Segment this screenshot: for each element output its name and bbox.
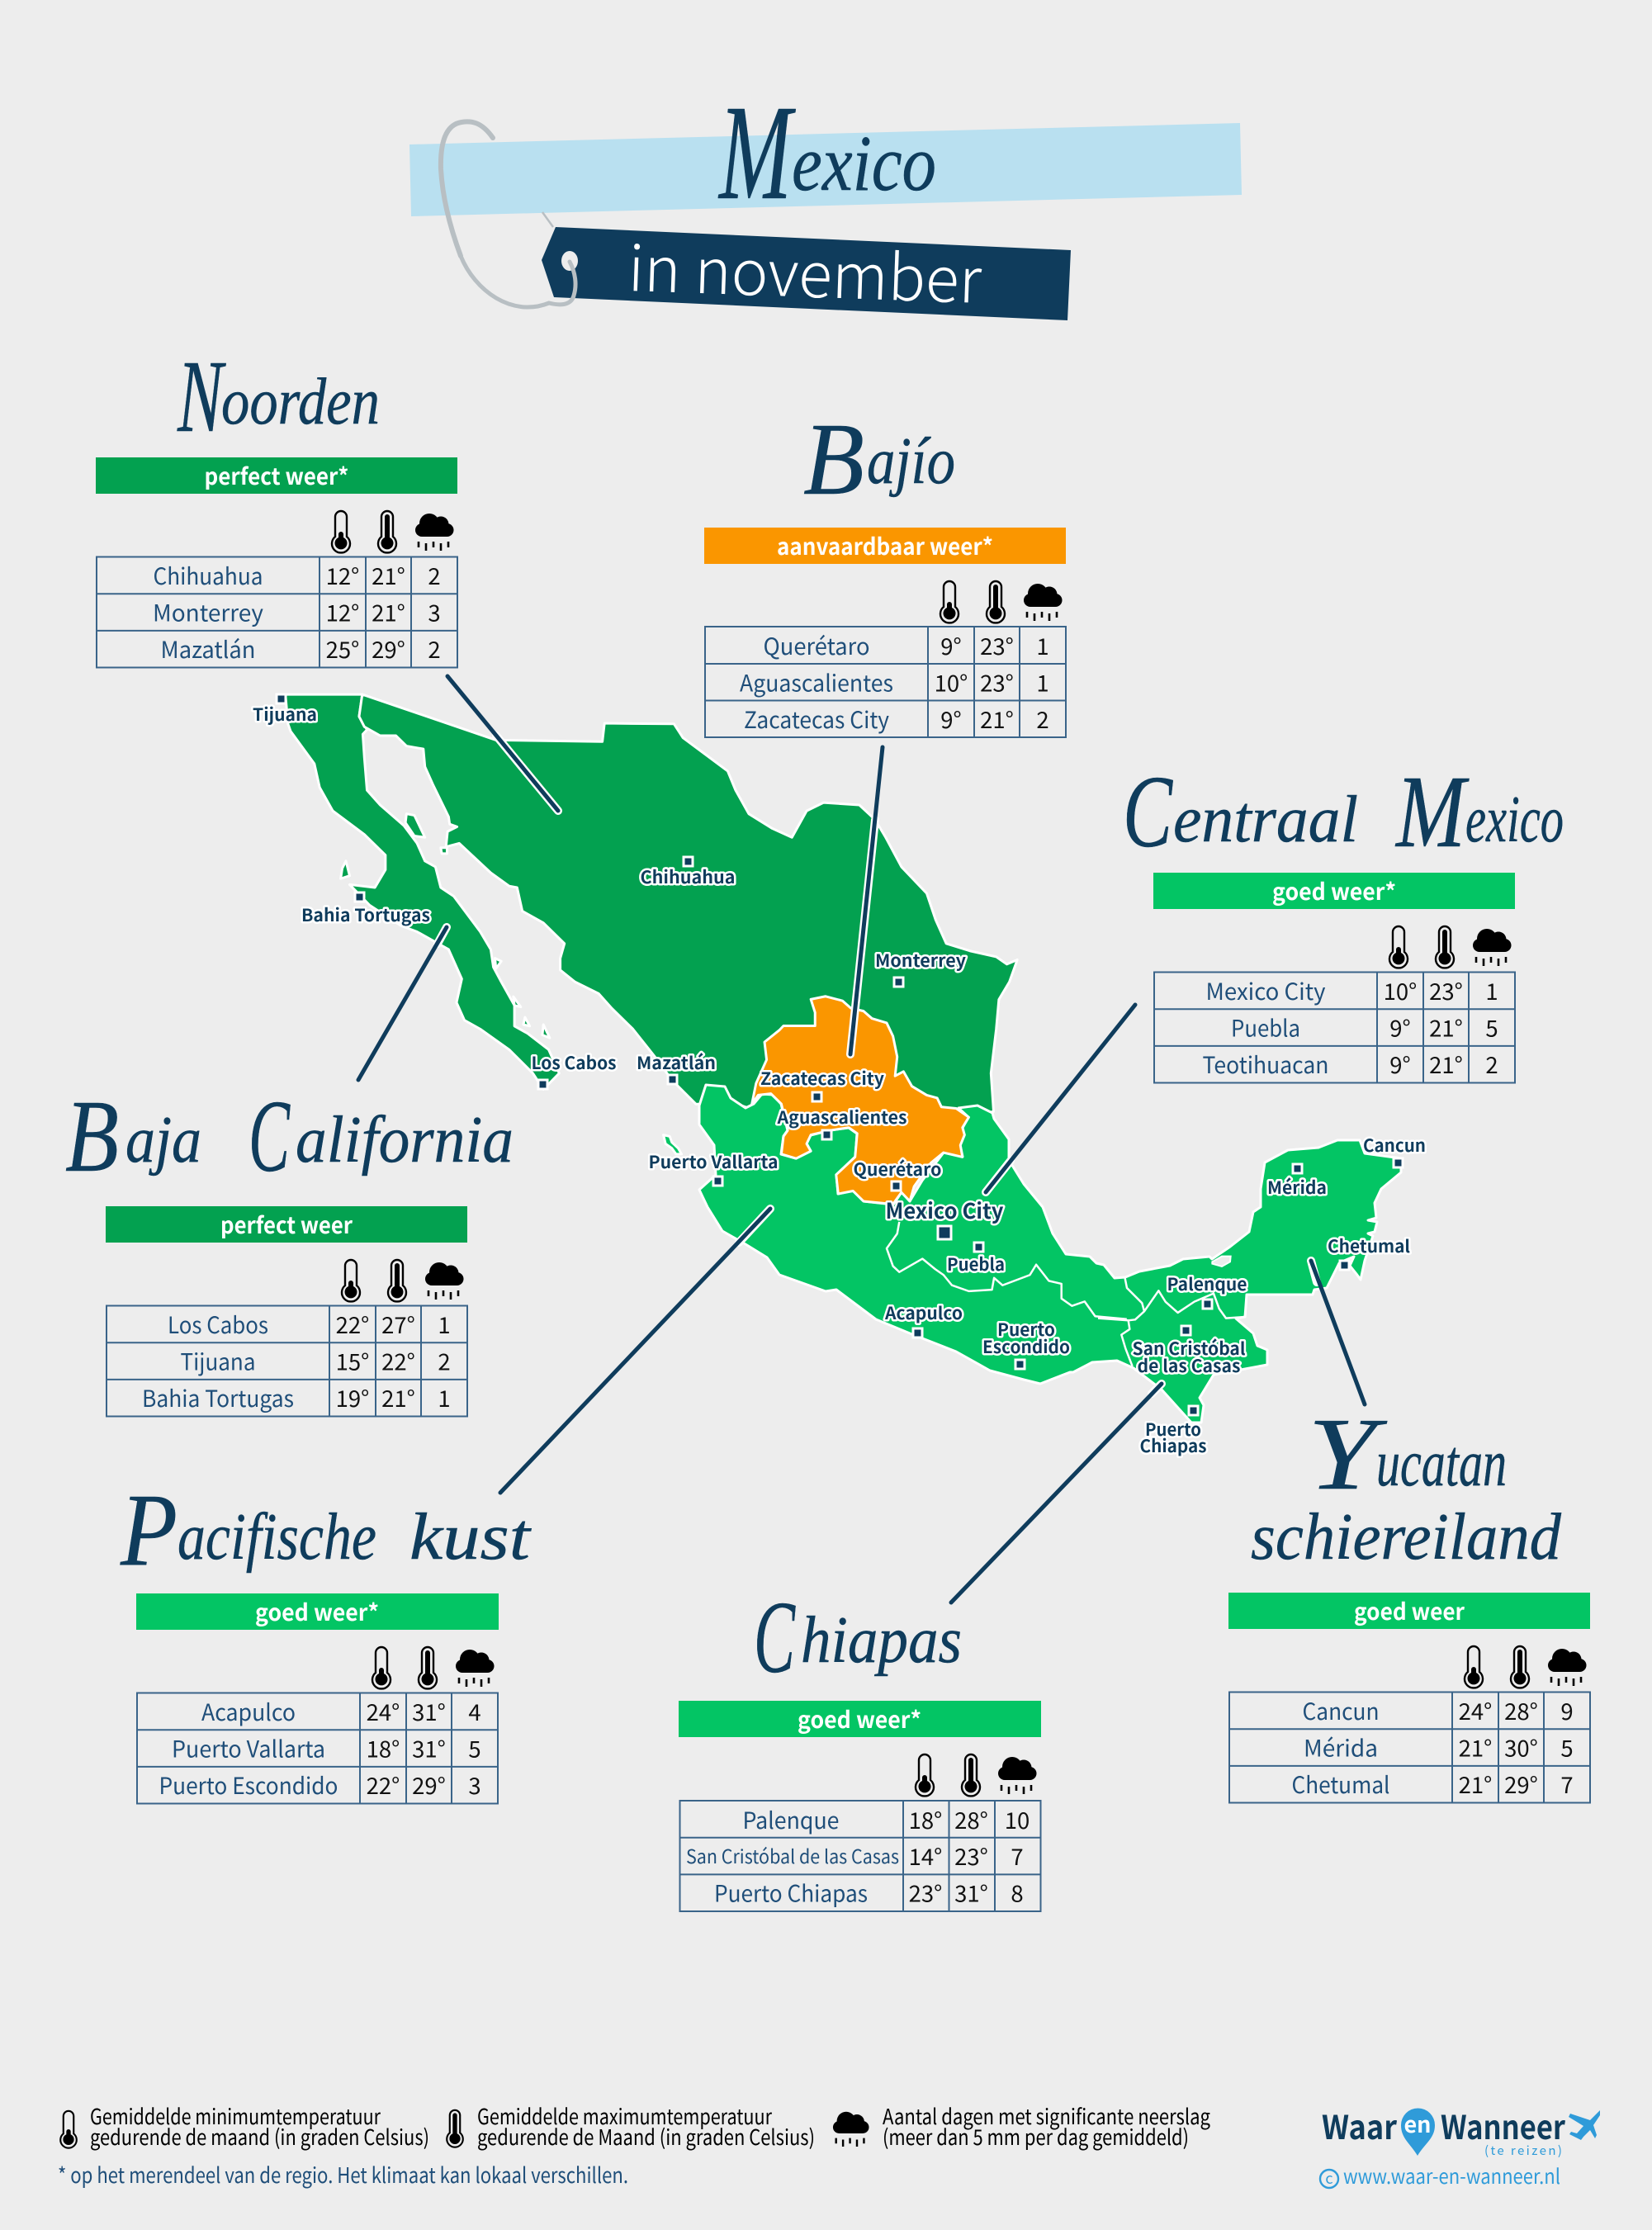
table: Centraal Mexico: Mexico City: [1205, 974, 1326, 1007]
city: Mexico City: [885, 1195, 1004, 1239]
legend text: minimum temperature: Gemiddelde minimumtemperatuur: [90, 2100, 381, 2131]
table: Baja California: 1: [438, 1307, 451, 1340]
heading: Bajio: ajío: [867, 425, 955, 498]
heading: Baja California: aja: [125, 1104, 201, 1177]
table: Pacifische kust: 31°: [412, 1730, 446, 1764]
table: Pacifische kust: Acapulco: [201, 1695, 296, 1728]
logo icon: plane: [1569, 2110, 1600, 2140]
table: Yucatan schiereiland: Cancun: [1303, 1694, 1379, 1727]
heading: Baja California: [65, 1080, 514, 1194]
icon: maximum temperature: [378, 511, 396, 552]
connector: Yucatan: [1311, 1261, 1365, 1404]
heading: Noorden: [177, 340, 380, 454]
table: Baja California: Tijuana: [180, 1344, 256, 1377]
icon: rain cloud: [456, 1650, 494, 1687]
copyright icon: c: [1325, 2167, 1333, 2189]
city: Palenque: [1167, 1271, 1247, 1309]
table: Noorden: Mazatlán: [160, 632, 256, 665]
region: Baja California and Noorden: [286, 694, 1017, 1139]
table: Noorden: 2: [428, 632, 441, 665]
heading: Chiapas: [754, 1581, 962, 1695]
table: Chiapas: 18°: [909, 1802, 942, 1835]
table: Pacifische kust: 18°: [367, 1730, 400, 1764]
table: Yucatan schiereiland: Chetumal: [1291, 1768, 1390, 1801]
city: Puerto Vallarta: [649, 1149, 778, 1186]
legend text: minimum temperature: [90, 2100, 429, 2152]
table: Chiapas: 14°: [909, 1839, 942, 1872]
table: Centraal Mexico: 9°: [1389, 1011, 1411, 1044]
heading: Pacifische kust: P: [120, 1474, 178, 1588]
city: Puebla: Puebla: [947, 1252, 1005, 1276]
heading: Pacifische kust: [120, 1474, 532, 1588]
logo pin: en: [1403, 2107, 1432, 2139]
city: Zacatecas City: [760, 1066, 884, 1101]
table: Baja California: 2: [438, 1344, 451, 1377]
table: Centraal Mexico: 23°: [1429, 973, 1463, 1006]
table: Bajio: 2: [1036, 702, 1049, 735]
heading: Yucatan schiereiland: schiereiland: [1251, 1501, 1562, 1574]
heading: Centraal Mexico: exico: [1465, 784, 1564, 856]
table: Yucatan schiereiland: [1229, 1692, 1590, 1803]
city: Los Cabos: Los Cabos: [532, 1050, 616, 1075]
table: Chiapas: 31°: [954, 1876, 988, 1909]
city: Mexico City: Mexico City: [885, 1195, 1004, 1225]
table: Noorden: 2: [428, 558, 441, 591]
heading: Baja California: alifornia: [296, 1104, 514, 1177]
banner: goed weer: goed weer*: [1272, 874, 1396, 907]
banner: goed weer: goed weer*: [798, 1702, 921, 1735]
city: Puerto Chiapas: Puerto: [1145, 1417, 1201, 1442]
icon: minimum temperature: [1389, 926, 1408, 968]
table: Baja California: 15°: [336, 1344, 369, 1377]
legend text: maximum temperature: [477, 2100, 815, 2152]
city: San Cristobal de las Casas: de las Casas: [1138, 1353, 1240, 1378]
table: Noorden: [97, 556, 457, 667]
table: Bajio: 1: [1036, 628, 1049, 661]
tag: [542, 227, 1071, 320]
table: Pacifische kust: 22°: [367, 1768, 400, 1801]
connector: Pacifische kust: [500, 1209, 770, 1493]
icon: rain cloud: [1024, 584, 1062, 621]
table: Centraal Mexico: 2: [1485, 1047, 1498, 1080]
icon: maximum temperature: [1511, 1646, 1529, 1688]
icon: maximum temperature: [962, 1754, 980, 1796]
heading: Centraal Mexico: entraal: [1173, 784, 1358, 856]
string over tag: [461, 256, 575, 307]
city: Merida: [1267, 1164, 1327, 1200]
table: Baja California: 19°: [336, 1380, 369, 1413]
table: Noorden: 3: [428, 594, 441, 627]
table: Baja California: 21°: [381, 1380, 415, 1413]
icon: minimum temperature: [1465, 1646, 1483, 1688]
table: Chiapas: San Cristóbal de las Casas: [686, 1841, 899, 1869]
heading: Yucatan schiereiland: Y: [1308, 1398, 1388, 1512]
table: Bajio: 9°: [940, 702, 962, 735]
heading: Chiapas: hiapas: [801, 1604, 962, 1677]
connector: Centraal Mexico: [986, 1005, 1135, 1192]
table: Bajio: 21°: [980, 702, 1014, 735]
table: Yucatan schiereiland: 7: [1560, 1767, 1574, 1800]
legend icon: rain cloud: [833, 2112, 869, 2147]
city: San Cristobal de las Casas: San Cristóbal: [1133, 1336, 1246, 1361]
banner: perfect weer: perfect weer*: [205, 459, 348, 492]
banner: perfect weer: [96, 457, 457, 494]
title: Mexico: exico: [792, 119, 936, 207]
icon: rain cloud: [1473, 929, 1511, 966]
table: Baja California: Bahia Tortugas: [142, 1381, 294, 1414]
icon: maximum temperature: [388, 1260, 406, 1301]
city: Puerto Vallarta: Puerto Vallarta: [649, 1149, 778, 1174]
banner: goed weer: [1228, 1593, 1590, 1629]
banner: goed weer: goed weer*: [255, 1595, 379, 1628]
city: Puerto Chiapas: [1139, 1406, 1207, 1458]
legend text: minimum temperature: gedurende de maand (in graden Celsius): [90, 2121, 429, 2152]
city: Acapulco: Acapulco: [884, 1300, 963, 1325]
panel body: Centraal Mexico: [1153, 873, 1515, 1083]
state borders: [664, 1135, 1247, 1366]
legend text: precipitation: [883, 2100, 1210, 2152]
table: Yucatan schiereiland: 21°: [1459, 1767, 1492, 1800]
table: Noorden: Chihuahua: [154, 559, 263, 592]
banner: perfect weer: perfect weer: [220, 1208, 353, 1241]
city: Acapulco: [884, 1300, 963, 1338]
legend text: maximum temperature: Gemiddelde maximumtemperatuur: [477, 2100, 773, 2131]
panel: Noorden: [96, 340, 457, 667]
logo: Waar en Wanneer: [1320, 2101, 1600, 2190]
title band: [409, 123, 1242, 216]
table: Baja California: Los Cabos: [168, 1308, 268, 1341]
table: Chiapas: 7: [1011, 1839, 1024, 1872]
legend icon: maximum temperature: [447, 2110, 463, 2147]
panel: Bajio: [704, 403, 1066, 737]
city: Palenque: Palenque: [1167, 1271, 1247, 1296]
table: Centraal Mexico: 1: [1485, 973, 1498, 1006]
legend text: precipitation: Aantal dagen met significante neerslag: [883, 2100, 1210, 2131]
panel body: Noorden: [96, 457, 457, 667]
table: Bajio: 23°: [980, 628, 1014, 661]
panel: Yucatan schiereiland: [1228, 1398, 1590, 1803]
connector: Noorden: [447, 676, 558, 811]
table: Yucatan schiereiland: 21°: [1459, 1730, 1492, 1764]
table: Bajio: 1: [1036, 665, 1049, 698]
connector lines: [358, 676, 1365, 1603]
icon: rain cloud: [998, 1757, 1037, 1794]
footnote: * op het merendeel van de regio. Het klimaat kan lokaal verschillen.: [58, 2159, 628, 2190]
logo word: Wanneer: Wanneer: [1441, 2101, 1565, 2149]
city: Cancun: Cancun: [1363, 1133, 1426, 1158]
icon: maximum temperature: [987, 581, 1005, 623]
panel body: Chiapas: [679, 1701, 1041, 1911]
title block: [409, 77, 1242, 321]
table: Pacifische kust: 3: [468, 1768, 481, 1801]
table: Noorden: 29°: [372, 632, 405, 665]
heading: Baja California: C: [249, 1080, 291, 1194]
table: Bajio: Zacatecas City: [744, 703, 889, 736]
panel: Centraal Mexico: [1123, 755, 1564, 1083]
table: Centraal Mexico: 5: [1485, 1011, 1498, 1044]
icon: minimum temperature: [940, 581, 959, 623]
table: Pacifische kust: 5: [468, 1730, 481, 1764]
panel body: Bajio: [704, 528, 1066, 737]
table: Bajio: 9°: [940, 628, 962, 661]
icon: rain cloud: [415, 514, 454, 551]
table: Centraal Mexico: [1154, 972, 1515, 1083]
city: Mazatlan: Mazatlán: [637, 1050, 716, 1075]
city: Aguascalientes: Aguascalientes: [776, 1105, 906, 1129]
heading: Noorden: N: [177, 340, 226, 454]
copyright icon: [1320, 2167, 1338, 2189]
heading: Bajio: [803, 403, 955, 517]
connector: Bajio: [850, 747, 883, 1054]
city: Monterrey: [875, 948, 966, 987]
table: Noorden: 21°: [372, 558, 405, 591]
legend icon: minimum temperature: [60, 2111, 77, 2148]
banner: aanvaardbaar weer: aanvaardbaar weer*: [777, 529, 993, 562]
table: Noorden: 25°: [326, 632, 359, 665]
table: Pacifische kust: 31°: [412, 1694, 446, 1727]
panel: Chiapas: [679, 1581, 1041, 1911]
city: Queretaro: Querétaro: [854, 1157, 941, 1181]
heading: Yucatan schiereiland: [1251, 1398, 1562, 1574]
table: Centraal Mexico: 10°: [1384, 973, 1417, 1006]
city: Zacatecas City: Zacatecas City: [760, 1066, 884, 1091]
table: Pacifische kust: 24°: [367, 1694, 400, 1727]
heading: Baja California: B: [65, 1080, 119, 1194]
panel: Baja California: [65, 1080, 514, 1417]
tag string: [441, 121, 493, 256]
table: Chiapas: 23°: [909, 1876, 942, 1909]
tag hole: [561, 251, 578, 271]
panel body: Yucatan schiereiland: [1228, 1593, 1590, 1803]
map of Mexico: [286, 694, 1401, 1423]
city: Chetumal: Chetumal: [1328, 1233, 1410, 1258]
table: Baja California: 22°: [336, 1307, 369, 1340]
heading: Bajio: B: [803, 403, 864, 517]
logo tagline: (te reizen): [1484, 2142, 1564, 2159]
table: Baja California: 22°: [381, 1344, 415, 1377]
heading: Centraal Mexico: [1123, 755, 1564, 869]
table: Pacifische kust: [137, 1693, 498, 1803]
website: www.waar-en-wanneer.nl: [1343, 2161, 1560, 2190]
table: Bajio: Aguascalientes: [740, 665, 893, 698]
connector: Chiapas: [951, 1384, 1162, 1603]
tag connecting string: [542, 212, 553, 227]
banner: goed weer: [679, 1701, 1041, 1737]
table: Centraal Mexico: 21°: [1429, 1047, 1463, 1080]
title: Mexico: M: [718, 77, 796, 228]
city markers and labels: [253, 694, 1426, 1458]
city: Merida: Mérida: [1267, 1175, 1327, 1200]
region: Pacifische kust, Centraal Mexico, Chiapas, Yucatan: [699, 1085, 1401, 1423]
heading: Pacifische kust: acifische: [178, 1501, 376, 1574]
table: Chiapas: 23°: [954, 1839, 988, 1872]
table: Centraal Mexico: Puebla: [1231, 1011, 1300, 1044]
logo pin: [1401, 2107, 1435, 2156]
table: Centraal Mexico: Teotihuacan: [1202, 1048, 1329, 1081]
banner: goed weer: [136, 1593, 499, 1630]
table: Yucatan schiereiland: 9: [1560, 1693, 1574, 1726]
city: Puerto Chiapas: Chiapas: [1139, 1433, 1207, 1458]
heading: Noorden: oorden: [221, 366, 380, 438]
table: Noorden: 12°: [326, 558, 359, 591]
legend text: precipitation: (meer dan 5 mm per dag gemiddeld): [883, 2121, 1189, 2152]
icon: minimum temperature: [342, 1260, 360, 1301]
table: Pacifische kust: 4: [468, 1694, 481, 1727]
table: Centraal Mexico: 9°: [1389, 1047, 1411, 1080]
legend: [58, 2100, 1210, 2190]
city: Puerto Escondido: Escondido: [982, 1334, 1070, 1359]
title: Mexico: [718, 77, 936, 228]
city: Tijuana: Tijuana: [253, 702, 317, 727]
table: Baja California: 1: [438, 1380, 451, 1413]
heading: Yucatan schiereiland: ucatan: [1376, 1427, 1507, 1500]
table: Baja California: [107, 1305, 467, 1417]
city: Puerto Escondido: Puerto: [997, 1317, 1055, 1342]
table: Yucatan schiereiland: 28°: [1504, 1693, 1538, 1726]
legend text: maximum temperature: gedurende de Maand (in graden Celsius): [477, 2121, 815, 2152]
icon: minimum temperature: [372, 1647, 391, 1688]
table: Baja California: 27°: [381, 1307, 415, 1340]
icon: maximum temperature: [1436, 926, 1454, 968]
table: Noorden: 12°: [326, 594, 359, 627]
panel body: Baja California: [106, 1206, 467, 1417]
table: Pacifische kust: Puerto Escondido: [159, 1768, 338, 1802]
table: Chiapas: 10: [1005, 1802, 1030, 1835]
city: Los Cabos: [532, 1050, 616, 1089]
heading: Centraal Mexico: M: [1394, 755, 1470, 869]
table: Bajio: [705, 627, 1066, 737]
city: Puerto Escondido: [982, 1317, 1070, 1369]
city: San Cristobal de las Casas: [1133, 1326, 1246, 1378]
city: Monterrey: Monterrey: [875, 948, 966, 973]
icon: minimum temperature: [332, 511, 350, 552]
panel: Pacifische kust: [120, 1474, 532, 1803]
table: Noorden: 21°: [372, 594, 405, 627]
heading: Centraal Mexico: C: [1123, 755, 1173, 869]
table: Chiapas: Palenque: [743, 1803, 839, 1836]
banner: goed weer: goed weer: [1354, 1594, 1465, 1627]
table: Chiapas: 28°: [954, 1802, 988, 1835]
table: Yucatan schiereiland: Mérida: [1304, 1730, 1378, 1764]
city: Chihuahua: Chihuahua: [641, 864, 735, 889]
table: Pacifische kust: 29°: [412, 1768, 446, 1801]
panel body: Pacifische kust: [136, 1593, 499, 1803]
banner: aanvaardbaar weer: [704, 528, 1066, 564]
heading: Chiapas: C: [754, 1581, 796, 1695]
city: Chetumal: [1328, 1233, 1410, 1270]
icon: maximum temperature: [419, 1647, 437, 1688]
table: Bajio: 10°: [935, 665, 968, 698]
table: Yucatan schiereiland: 30°: [1504, 1730, 1538, 1764]
table: Chiapas: [679, 1801, 1040, 1911]
table: Chiapas: 8: [1011, 1876, 1024, 1909]
subtitle: in november: in november: [627, 218, 984, 321]
table: Noorden: Monterrey: [153, 596, 263, 629]
banner: perfect weer: [106, 1206, 467, 1243]
table: Yucatan schiereiland: 29°: [1504, 1767, 1538, 1800]
city: Bahia Tortugas: Bahia Tortugas: [301, 902, 430, 927]
region: Bajio: [752, 997, 968, 1205]
table: Yucatan schiereiland: 5: [1560, 1730, 1574, 1764]
table: Yucatan schiereiland: 24°: [1459, 1693, 1492, 1726]
heading: Pacifische kust: kust: [409, 1501, 532, 1574]
icon: rain cloud: [1548, 1649, 1587, 1686]
table: Chiapas: Puerto Chiapas: [714, 1876, 868, 1909]
table: Bajio: Querétaro: [763, 629, 870, 662]
logo word: Waar: Waar: [1322, 2101, 1397, 2149]
table: Pacifische kust: Puerto Vallarta: [172, 1732, 325, 1765]
connector: Baja California: [358, 927, 447, 1080]
banner: goed weer: [1153, 873, 1515, 909]
table: Bajio: 23°: [980, 665, 1014, 698]
icon: minimum temperature: [916, 1754, 934, 1796]
icon: rain cloud: [425, 1262, 464, 1300]
table: Centraal Mexico: 21°: [1429, 1011, 1463, 1044]
